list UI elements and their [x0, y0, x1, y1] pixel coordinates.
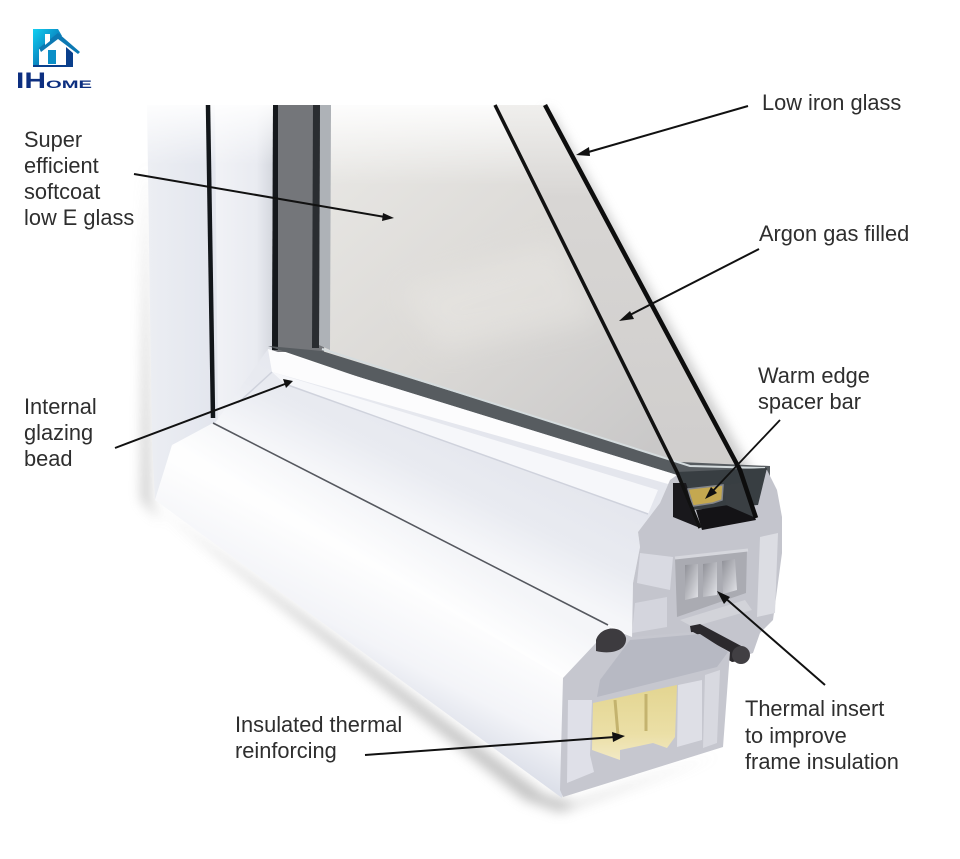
glazing cavity — [673, 482, 756, 530]
label: warm edge spacer bar: Warm edge — [758, 363, 870, 388]
window cross-section illustration — [142, 105, 782, 812]
drop shadows — [142, 108, 755, 812]
label: thermal insert: to improve — [745, 723, 847, 748]
arrow: warm edge spacer — [705, 420, 780, 499]
arrow: insulated reinforcing — [365, 732, 625, 755]
panel: internal glazing bead — [215, 349, 677, 637]
panel: upper profile section — [632, 468, 782, 664]
panel: grey spacer band — [268, 105, 770, 492]
label: thermal insert: Thermal insert — [745, 696, 884, 721]
arrow: argon gas — [619, 249, 759, 321]
label: super efficient softcoat low E glass: softcoat — [24, 179, 100, 204]
logo: IHome: OME — [46, 79, 92, 91]
label: argon gas filled: Argon gas filled — [759, 221, 909, 246]
label: thermal insert: frame insulation — [745, 749, 899, 774]
label: warm edge spacer bar: spacer bar — [758, 389, 861, 414]
panel: super efficient low E glass pane — [322, 105, 680, 478]
panel: argon gas gap — [495, 105, 745, 478]
arrow: thermal insert — [717, 591, 825, 685]
label: insulated thermal reinforcing: reinforcing — [235, 738, 337, 763]
label: internal glazing bead: bead — [24, 446, 72, 471]
label: super efficient softcoat low E glass: Super — [24, 127, 82, 152]
bottom gasket — [690, 624, 748, 662]
label: internal glazing bead: glazing — [24, 420, 93, 445]
chambers — [567, 700, 594, 783]
panel: left frame — [147, 105, 275, 500]
panel: lower sill — [155, 423, 613, 798]
glass pane edges — [208, 105, 756, 528]
icon: house — [33, 29, 80, 67]
icon: warm edge spacer bar — [688, 485, 723, 506]
arrow: internal glazing bead — [115, 379, 293, 448]
logo: IHome — [16, 29, 92, 93]
label: insulated thermal reinforcing: Insulated thermal — [235, 712, 402, 737]
upper shelf — [597, 634, 728, 697]
label: internal glazing bead: Internal — [24, 394, 97, 419]
thermal insert — [675, 549, 748, 617]
label: super efficient softcoat low E glass: efficient — [24, 153, 99, 178]
gasket — [596, 628, 626, 652]
label: super efficient softcoat low E glass: low E glass — [24, 205, 134, 230]
label: low iron glass: Low iron glass — [762, 90, 901, 115]
dark spacer band — [677, 468, 767, 510]
thermal reinforcing insert — [592, 685, 677, 760]
arrow: low E glass — [134, 174, 394, 221]
logo wordmark: IH — [16, 68, 46, 93]
panel: lower profile section — [560, 628, 730, 797]
hollow chambers — [637, 553, 673, 590]
arrow: low iron glass — [576, 106, 748, 156]
